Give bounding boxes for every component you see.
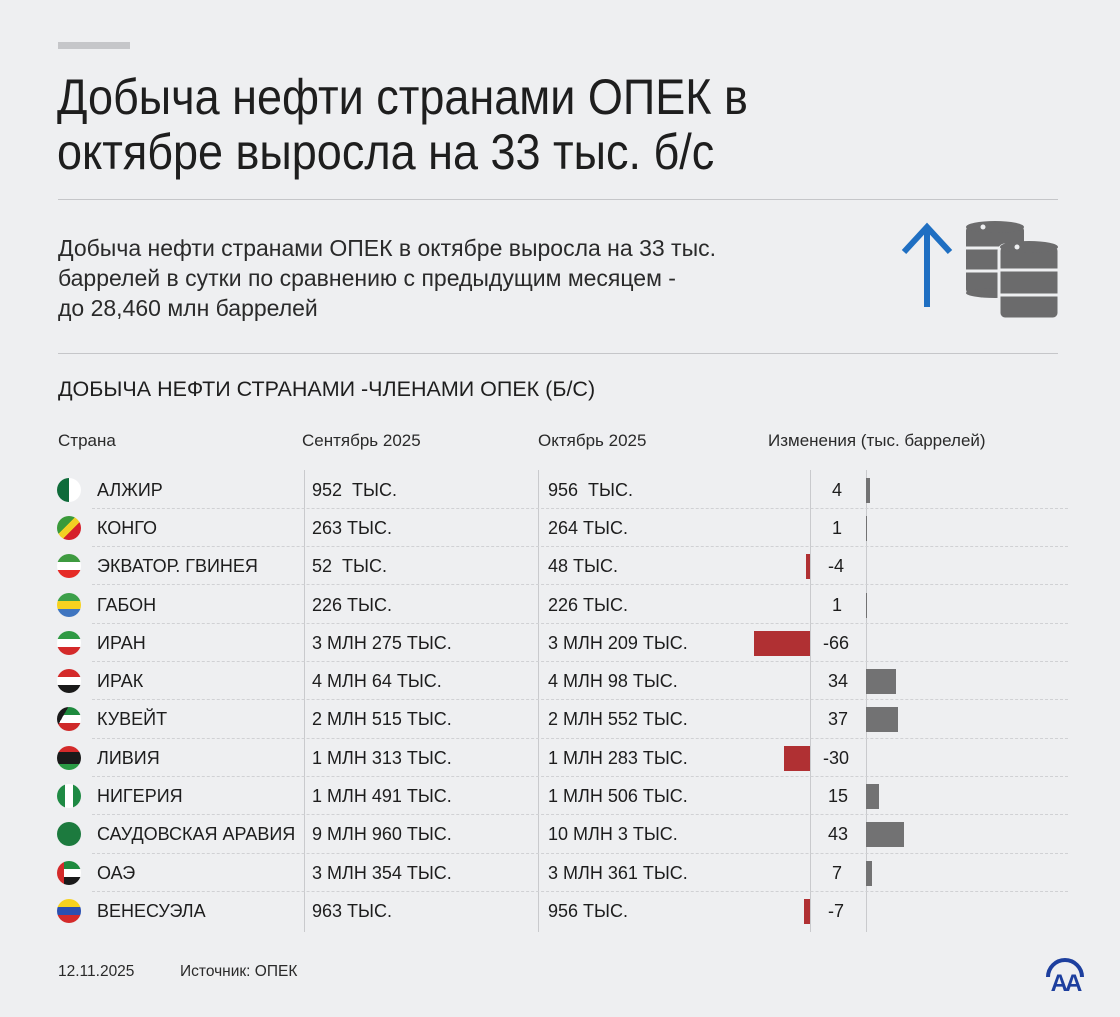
row: Libya: ЛИВИЯ [97,748,160,768]
row: UAE [57,861,872,886]
row: UAE: 3 МЛН 354 ТЫС. [312,863,452,883]
row: Saudi Arabia [57,822,904,847]
footer: date and source: Источник: ОПЕК [180,963,297,980]
row: Nigeria: НИГЕРИЯ [97,786,183,806]
row: Iraq [57,669,896,694]
row: Iran: -66 [823,633,849,653]
row: Venezuela: 963 ТЫС. [312,901,392,921]
row: Libya: 1 МЛН 283 ТЫС. [548,748,688,768]
row: Congo [57,516,867,541]
row: Iran: 3 МЛН 209 ТЫС. [548,633,688,653]
top accent bar [58,42,130,49]
row: Congo: 264 ТЫС. [548,518,628,538]
row: Iraq: 34 [828,671,848,691]
row: Libya: -30 [823,748,849,768]
row: Gabon: ГАБОН [97,595,156,615]
column headers: Сентябрь 2025 [302,431,421,450]
column headers: Страна [58,431,116,450]
row: Iraq: 4 МЛН 64 ТЫС. [312,671,442,691]
row: Nigeria: 15 [828,786,848,806]
row: Venezuela: -7 [828,901,844,921]
row: Eq Guinea [57,554,844,579]
row: Venezuela [57,899,844,924]
row: Eq Guinea: 52 ТЫС. [312,556,387,576]
title [57,69,748,180]
subtitle text [58,235,716,321]
row: Algeria: 4 [832,480,842,500]
row: Nigeria: 1 МЛН 506 ТЫС. [548,786,688,806]
row: Algeria: 952 ТЫС. [312,480,397,500]
row: UAE: ОАЭ [97,863,135,883]
row: Iraq: ИРАК [97,671,143,691]
title: октябре выросла на 33 тыс. б/с [57,124,714,180]
row: Libya [57,746,849,771]
logo: AA [1046,958,1084,993]
row: Saudi Arabia: 10 МЛН 3 ТЫС. [548,824,678,844]
row: Iran: 3 МЛН 275 ТЫС. [312,633,452,653]
row: Iran: ИРАН [97,633,146,653]
icon: arrow and barrels [902,221,1058,318]
row: Libya: 1 МЛН 313 ТЫС. [312,748,452,768]
column headers: Изменения (тыс. баррелей) [768,431,986,450]
row: Algeria: АЛЖИР [97,480,163,500]
footer: date and source [58,963,298,980]
row: Gabon: 226 ТЫС. [548,595,628,615]
row: Kuwait: КУВЕЙТ [97,709,167,729]
row: Gabon [57,593,867,618]
row: Congo: 263 ТЫС. [312,518,392,538]
row: Iran [57,631,849,656]
column headers [58,431,986,450]
title: Добыча нефти странами ОПЕК в [57,69,748,125]
row: Congo: 1 [832,518,842,538]
row: Nigeria [57,784,879,809]
row: Venezuela: 956 ТЫС. [548,901,628,921]
column headers: Октябрь 2025 [538,431,646,450]
row: Kuwait: 2 МЛН 552 ТЫС. [548,709,688,729]
row: Algeria [57,478,870,503]
subtitle text: Добыча нефти странами ОПЕК в октябре выросла на 33 тыс. [58,235,716,261]
footer: date and source: 12.11.2025 [58,963,134,980]
row: Congo: КОНГО [97,518,157,538]
row: Saudi Arabia: 43 [828,824,848,844]
row: Kuwait [57,707,898,732]
row: Kuwait: 37 [828,709,848,729]
subtitle text: баррелей в сутки по сравнению с предыдущим месяцем - [58,265,676,291]
row: Venezuela: ВЕНЕСУЭЛА [97,901,206,921]
row: Kuwait: 2 МЛН 515 ТЫС. [312,709,452,729]
row: Saudi Arabia: САУДОВСКАЯ АРАВИЯ [97,824,295,844]
row: Gabon: 1 [832,595,842,615]
row: Eq Guinea: 48 ТЫС. [548,556,618,576]
row: Iraq: 4 МЛН 98 ТЫС. [548,671,678,691]
row: UAE: 3 МЛН 361 ТЫС. [548,863,688,883]
subtitle text: до 28,460 млн баррелей [58,295,318,321]
row: Gabon: 226 ТЫС. [312,595,392,615]
row: Algeria: 956 ТЫС. [548,480,633,500]
row: Saudi Arabia: 9 МЛН 960 ТЫС. [312,824,452,844]
row: Eq Guinea: ЭКВАТОР. ГВИНЕЯ [97,556,258,576]
table [57,478,1068,924]
row: Eq Guinea: -4 [828,556,844,576]
row: UAE: 7 [832,863,842,883]
row: Nigeria: 1 МЛН 491 ТЫС. [312,786,452,806]
table heading: ДОБЫЧА НЕФТИ СТРАНАМИ -ЧЛЕНАМИ ОПЕК (Б/С) [58,377,595,401]
